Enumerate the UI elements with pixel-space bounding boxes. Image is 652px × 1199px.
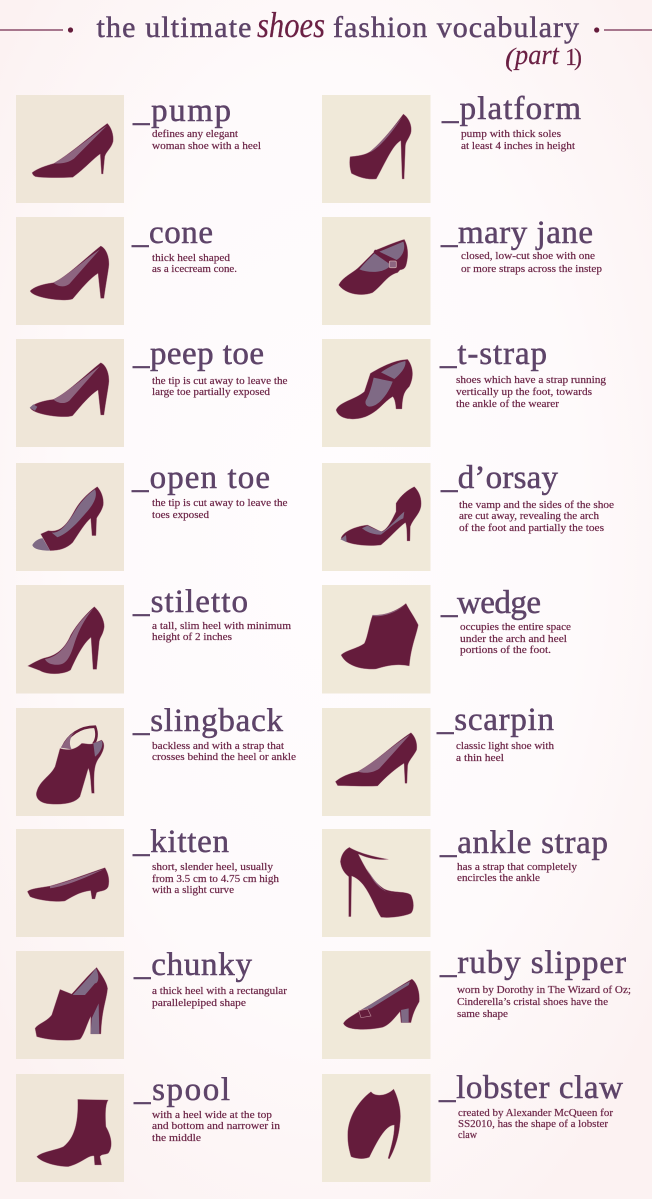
description: from 3.5 cm to 4.75 cm high	[152, 873, 280, 885]
panel: t-strap	[322, 336, 607, 447]
description	[152, 375, 288, 398]
icon: chunky heel shoe	[35, 967, 108, 1040]
description: defines any elegant	[152, 128, 238, 140]
description: the tip is cut away to leave the	[152, 497, 288, 509]
icon: d'orsay shoe	[340, 487, 421, 546]
panel: d'orsay	[322, 460, 614, 571]
description	[457, 861, 578, 884]
description: the middle	[152, 1132, 201, 1144]
description	[152, 252, 237, 275]
icon: ruby slipper shoe	[343, 979, 419, 1029]
title	[0, 5, 652, 72]
term: _cone	[131, 215, 213, 251]
term: _t-strap	[439, 336, 547, 372]
term: _d’orsay	[440, 460, 558, 496]
shoe tile	[16, 463, 124, 571]
shoe tile	[322, 951, 430, 1059]
shoe tile	[16, 708, 124, 816]
description: the vamp and the sides of the shoe	[459, 499, 614, 511]
description	[460, 621, 571, 656]
shoe tile	[16, 339, 124, 447]
description: Cinderella’s cristal shoes have the	[457, 996, 608, 1008]
icon: mary jane shoe	[339, 239, 408, 295]
panel: ruby slipper	[322, 945, 631, 1059]
description: created by Alexander McQueen for	[458, 1107, 613, 1119]
term: _platform	[441, 91, 581, 127]
term: _kitten	[132, 824, 229, 860]
description: with a heel wide at the top	[152, 1109, 272, 1121]
shoe tile	[16, 829, 124, 937]
icon: cone heel shoe	[30, 246, 109, 300]
description: SS2010, has the shape of a lobster	[458, 1118, 608, 1130]
shoe tile	[322, 708, 430, 816]
description: the ankle of the wearer	[456, 398, 559, 410]
description: shoes which have a strap running	[456, 374, 607, 386]
description: with a slight curve	[152, 884, 234, 896]
description: thick heel shaped	[152, 252, 231, 264]
description	[459, 499, 614, 534]
description: claw	[458, 1129, 477, 1141]
icon: ankle strap shoe	[340, 847, 413, 918]
description: parallelepiped shape	[152, 997, 246, 1009]
description: vertically up the foot, towards	[456, 386, 592, 398]
shoe tile	[322, 463, 430, 571]
term: _wedge	[440, 585, 541, 621]
icon: wedge shoe	[341, 603, 418, 669]
description: encircles the ankle	[457, 872, 540, 884]
description	[458, 1107, 613, 1141]
term: _stiletto	[132, 584, 248, 620]
icon: slingback shoe	[36, 727, 104, 804]
description: under the arch and heel	[460, 633, 567, 645]
icon: kitten heel shoe	[27, 868, 109, 901]
shoe tile	[16, 217, 124, 325]
description: the tip is cut away to leave the	[152, 375, 288, 387]
description: of the foot and partially the toes	[459, 522, 604, 534]
description	[456, 374, 607, 410]
description: worn by Dorothy in The Wizard of Oz;	[457, 984, 631, 996]
shoe tile	[322, 95, 430, 203]
description: a thick heel with a rectangular	[152, 985, 287, 997]
title: fashion vocabulary	[333, 11, 579, 44]
icon: spool heel boot	[37, 1099, 111, 1167]
icon: scarpin shoe	[335, 733, 417, 786]
term: _spool	[133, 1072, 230, 1108]
description: occupies the entire space	[460, 621, 571, 633]
description: as a icecream cone.	[152, 263, 237, 275]
panel: spool	[16, 1072, 281, 1182]
term: _peep toe	[132, 336, 264, 372]
description: crosses behind the heel or ankle	[152, 751, 296, 763]
icon: peep toe shoe	[30, 363, 109, 417]
panel: open toe	[16, 460, 288, 571]
term: _mary jane	[440, 215, 593, 251]
description: toes exposed	[152, 509, 210, 521]
title: the ultimate	[96, 11, 252, 44]
icon: t-strap shoe	[336, 359, 413, 419]
description: at least 4 inches in height	[461, 140, 575, 152]
panel: peep toe	[16, 336, 288, 447]
panel: lobster claw	[322, 1070, 623, 1182]
shoe tile	[322, 585, 430, 694]
description: woman shoe with a heel	[152, 140, 261, 152]
description	[152, 128, 261, 152]
shoe tile	[322, 1074, 430, 1182]
term: _ankle strap	[439, 825, 608, 861]
panel: stiletto	[16, 584, 292, 694]
description: are cut away, revealing the arch	[459, 510, 600, 522]
term: _scarpin	[436, 702, 554, 738]
shoe tile	[16, 95, 124, 203]
description	[461, 250, 602, 275]
panel: slingback	[16, 703, 296, 816]
panel: ankle strap	[322, 825, 608, 937]
panel: kitten	[16, 824, 280, 937]
shoe tile	[16, 1074, 124, 1182]
description	[456, 740, 555, 764]
description: or more straps across the instep	[461, 263, 602, 275]
description	[152, 497, 288, 521]
shoe tile	[322, 829, 430, 937]
description: backless and with a strap that	[152, 740, 284, 752]
description	[461, 128, 575, 152]
icon: stiletto shoe	[28, 607, 104, 674]
description: and bottom and narrower in	[152, 1120, 281, 1132]
description: closed, low-cut shoe with one	[461, 250, 595, 262]
icon: platform shoe	[350, 114, 411, 179]
description	[152, 740, 296, 763]
description	[152, 861, 280, 896]
panel: scarpin	[322, 702, 555, 816]
shoe tile	[322, 217, 430, 325]
title: 1)	[565, 45, 582, 71]
shoe tile	[16, 951, 124, 1059]
term: _slingback	[132, 703, 284, 739]
description: a tall, slim heel with minimum	[152, 620, 292, 632]
description: height of 2 inches	[152, 631, 232, 643]
description	[152, 1109, 281, 1144]
title: part	[513, 39, 560, 71]
description	[457, 984, 631, 1020]
term: _open toe	[131, 460, 270, 496]
description	[152, 985, 287, 1009]
icon: pump shoe	[32, 123, 113, 178]
title: (	[505, 43, 517, 72]
description: has a strap that completely	[457, 861, 578, 873]
panel: mary jane	[322, 215, 602, 325]
shoe tile	[16, 585, 124, 694]
term: _ruby slipper	[439, 945, 626, 981]
description: same shape	[457, 1008, 508, 1020]
shoe tile	[322, 339, 430, 447]
term: _lobster claw	[438, 1070, 623, 1106]
description	[152, 620, 292, 643]
description: classic light shoe with	[456, 740, 555, 752]
description: pump with thick soles	[461, 128, 561, 140]
description: large toe partially exposed	[152, 386, 271, 398]
panel: platform	[322, 91, 581, 203]
panel: wedge	[322, 585, 571, 694]
term: _chunky	[133, 947, 252, 983]
icon: lobster claw shoe	[348, 1089, 400, 1159]
description: a thin heel	[456, 752, 504, 764]
icon: open toe shoe	[32, 487, 103, 551]
term: _pump	[132, 93, 231, 129]
description: portions of the foot.	[460, 644, 551, 656]
description: short, slender heel, usually	[152, 861, 274, 873]
title: shoes	[257, 5, 325, 45]
panel: chunky	[16, 947, 287, 1059]
panel: cone	[16, 215, 237, 325]
panel: pump	[16, 93, 261, 203]
